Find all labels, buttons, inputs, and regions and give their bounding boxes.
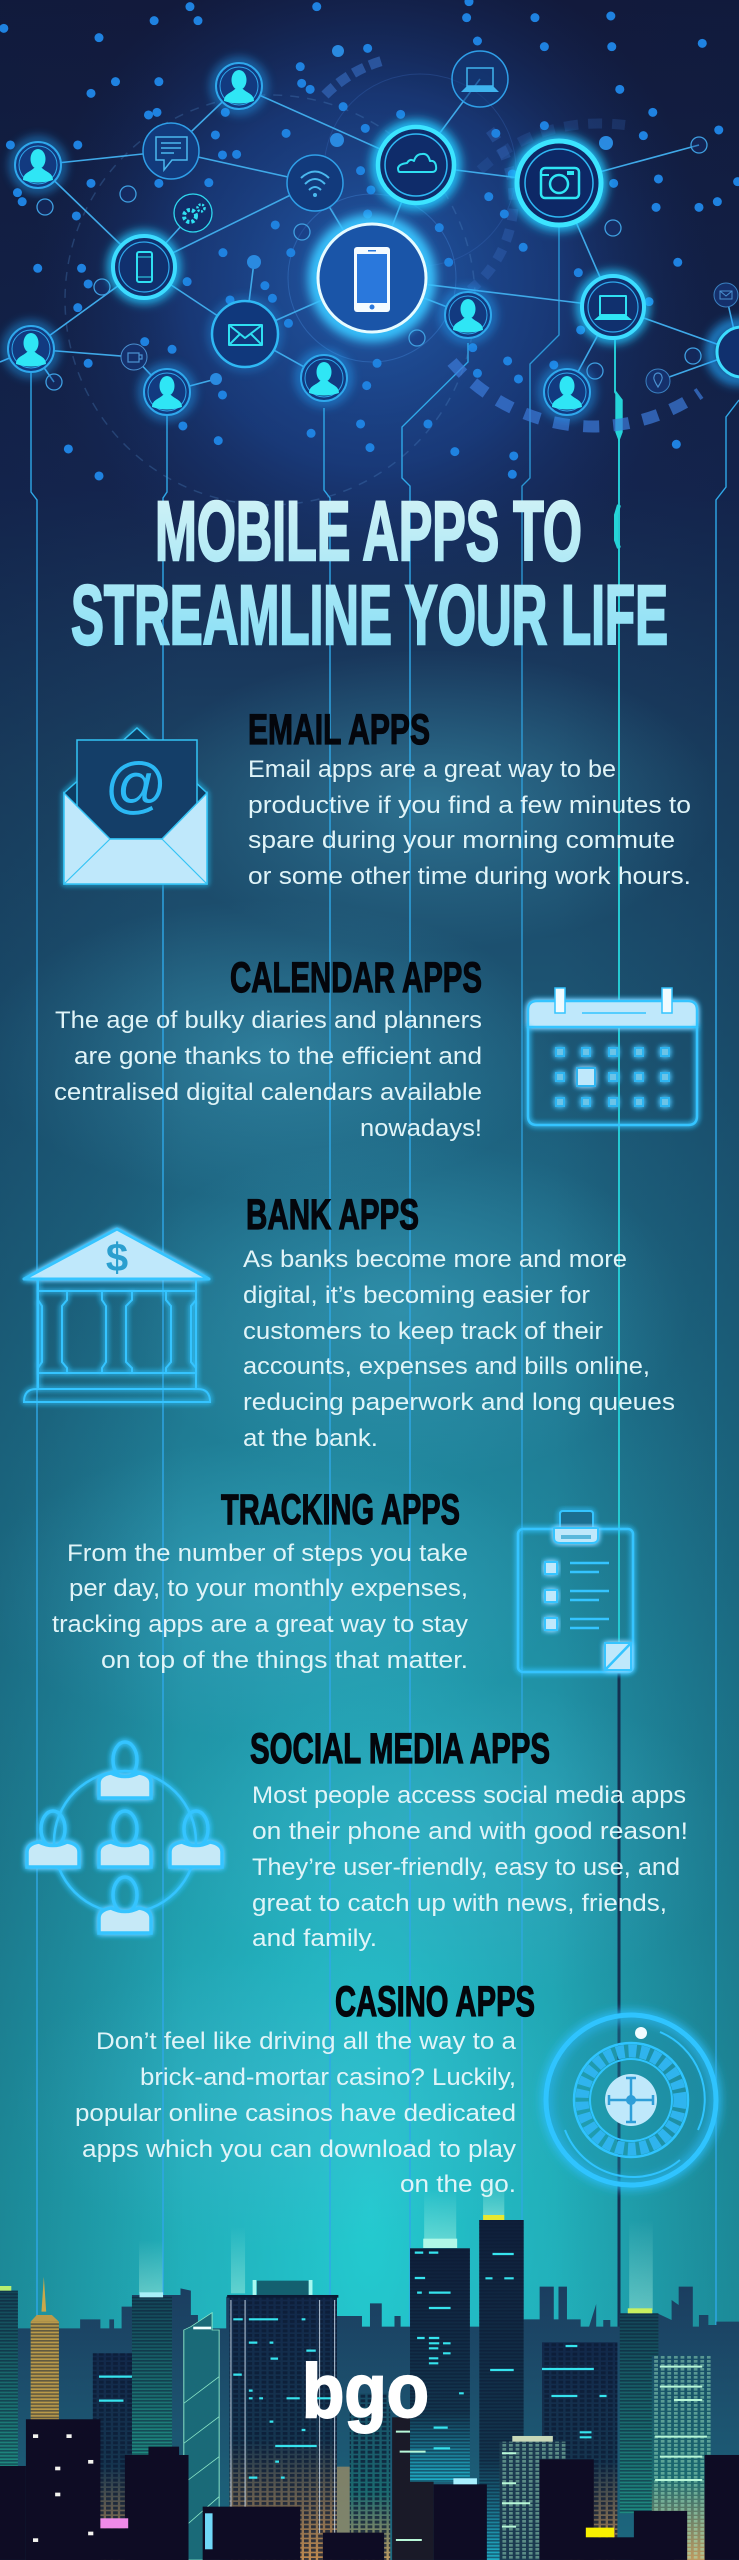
text block bbox=[54, 1007, 482, 1142]
floating dots bbox=[4, 2, 738, 476]
text block: centralised digital calendars available bbox=[54, 1079, 482, 1106]
panel: tracking apps bbox=[52, 1486, 633, 1674]
text block: digital, it’s becoming easier for bbox=[243, 1282, 590, 1309]
text block: nowadays! bbox=[360, 1115, 482, 1142]
heading: CALENDAR APPS bbox=[230, 954, 482, 1002]
text block: apps which you can download to play bbox=[82, 2136, 516, 2163]
light rays bbox=[139, 2180, 653, 2310]
heading: BANK APPS bbox=[246, 1191, 419, 1239]
icon: bank bbox=[24, 1229, 210, 1402]
text block: and family. bbox=[252, 1925, 377, 1952]
panel: email apps bbox=[64, 706, 691, 890]
heading: TRACKING APPS bbox=[221, 1486, 460, 1534]
text block bbox=[75, 2028, 517, 2198]
text block: are gone thanks to the efficient and bbox=[74, 1043, 482, 1070]
text block: on the go. bbox=[400, 2171, 516, 2198]
decorative dashed rings bbox=[65, 60, 700, 505]
text block: They’re user-friendly, easy to use, and bbox=[252, 1854, 680, 1881]
icon: envelope bbox=[64, 728, 207, 884]
panel: calendar apps bbox=[54, 954, 697, 1142]
node: chat bbox=[143, 123, 199, 179]
icon: calendar bbox=[528, 988, 697, 1125]
text block bbox=[252, 1782, 688, 1952]
city skyline bbox=[0, 2180, 739, 2560]
text block: From the number of steps you take bbox=[67, 1540, 468, 1567]
node: phone left bbox=[113, 236, 175, 298]
text block: accounts, expenses and bills online, bbox=[243, 1353, 650, 1380]
node: camera bbox=[517, 141, 601, 225]
icon: envelope: @ bbox=[105, 751, 167, 820]
solid blue dots bbox=[210, 45, 613, 385]
text block bbox=[52, 1540, 468, 1674]
small outline circles bbox=[37, 137, 707, 390]
node: gears bbox=[174, 194, 212, 232]
heading: CASINO APPS bbox=[335, 1978, 535, 2026]
node: laptop right bbox=[582, 276, 644, 338]
text block: spare during your morning commute bbox=[248, 827, 675, 854]
panel: casino apps bbox=[75, 1978, 716, 2198]
text block: on their phone and with good reason! bbox=[252, 1818, 688, 1845]
towers with window grids bbox=[0, 2215, 711, 2560]
logo: bgo: bgo bbox=[302, 2349, 429, 2434]
text block: Don’t feel like driving all the way to a bbox=[96, 2028, 517, 2055]
text block: tracking apps are a great way to stay bbox=[52, 1611, 468, 1638]
text block bbox=[248, 756, 691, 890]
accent lights and white windows bbox=[33, 2434, 614, 2549]
icon: roulette wheel bbox=[546, 2015, 716, 2185]
far skyline bbox=[0, 2220, 739, 2560]
text block: per day, to your monthly expenses, bbox=[69, 1575, 468, 1602]
user nodes bbox=[8, 63, 590, 415]
node: coffee bbox=[121, 344, 147, 370]
panel: social media apps bbox=[27, 1725, 688, 1952]
text block bbox=[243, 1246, 675, 1452]
text block: on top of the things that matter. bbox=[101, 1647, 468, 1674]
text block: customers to keep track of their bbox=[243, 1318, 603, 1345]
title bbox=[71, 484, 668, 662]
connection lines bbox=[0, 79, 739, 392]
node: right edge bbox=[717, 327, 739, 377]
text block: Email apps are a great way to be bbox=[248, 756, 616, 783]
node: laptop outline bbox=[452, 51, 508, 107]
lit windows bbox=[99, 2253, 607, 2478]
icon: people network bbox=[27, 1742, 222, 1933]
header network illustration bbox=[0, 2, 739, 505]
node: cloud bbox=[378, 127, 454, 203]
text block: popular online casinos have dedicated bbox=[75, 2100, 516, 2127]
heading: SOCIAL MEDIA APPS bbox=[250, 1725, 550, 1773]
icon: bank: $ bbox=[106, 1236, 128, 1280]
text block: great to catch up with news, friends, bbox=[252, 1890, 667, 1917]
text block: productive if you find a few minutes to bbox=[248, 792, 691, 819]
text block: As banks become more and more bbox=[243, 1246, 627, 1273]
panel: bank apps bbox=[24, 1191, 675, 1452]
text block: at the bank. bbox=[243, 1425, 378, 1452]
text block: brick-and-mortar casino? Luckily, bbox=[140, 2064, 516, 2091]
heading: EMAIL APPS bbox=[248, 706, 430, 754]
icon: clipboard bbox=[518, 1511, 633, 1672]
node: map pin bbox=[646, 369, 670, 393]
foreground dark buildings bbox=[0, 2419, 739, 2560]
node: small envelope bbox=[714, 283, 738, 307]
text block: or some other time during work hours. bbox=[248, 863, 691, 890]
text block: reducing paperwork and long queues bbox=[243, 1389, 675, 1416]
node: wifi bbox=[287, 155, 343, 211]
node glows bbox=[7, 62, 739, 416]
node: email bbox=[212, 301, 278, 367]
text block: Most people access social media apps bbox=[252, 1782, 686, 1809]
text block: The age of bulky diaries and planners bbox=[55, 1007, 482, 1034]
central phone node bbox=[316, 222, 428, 334]
